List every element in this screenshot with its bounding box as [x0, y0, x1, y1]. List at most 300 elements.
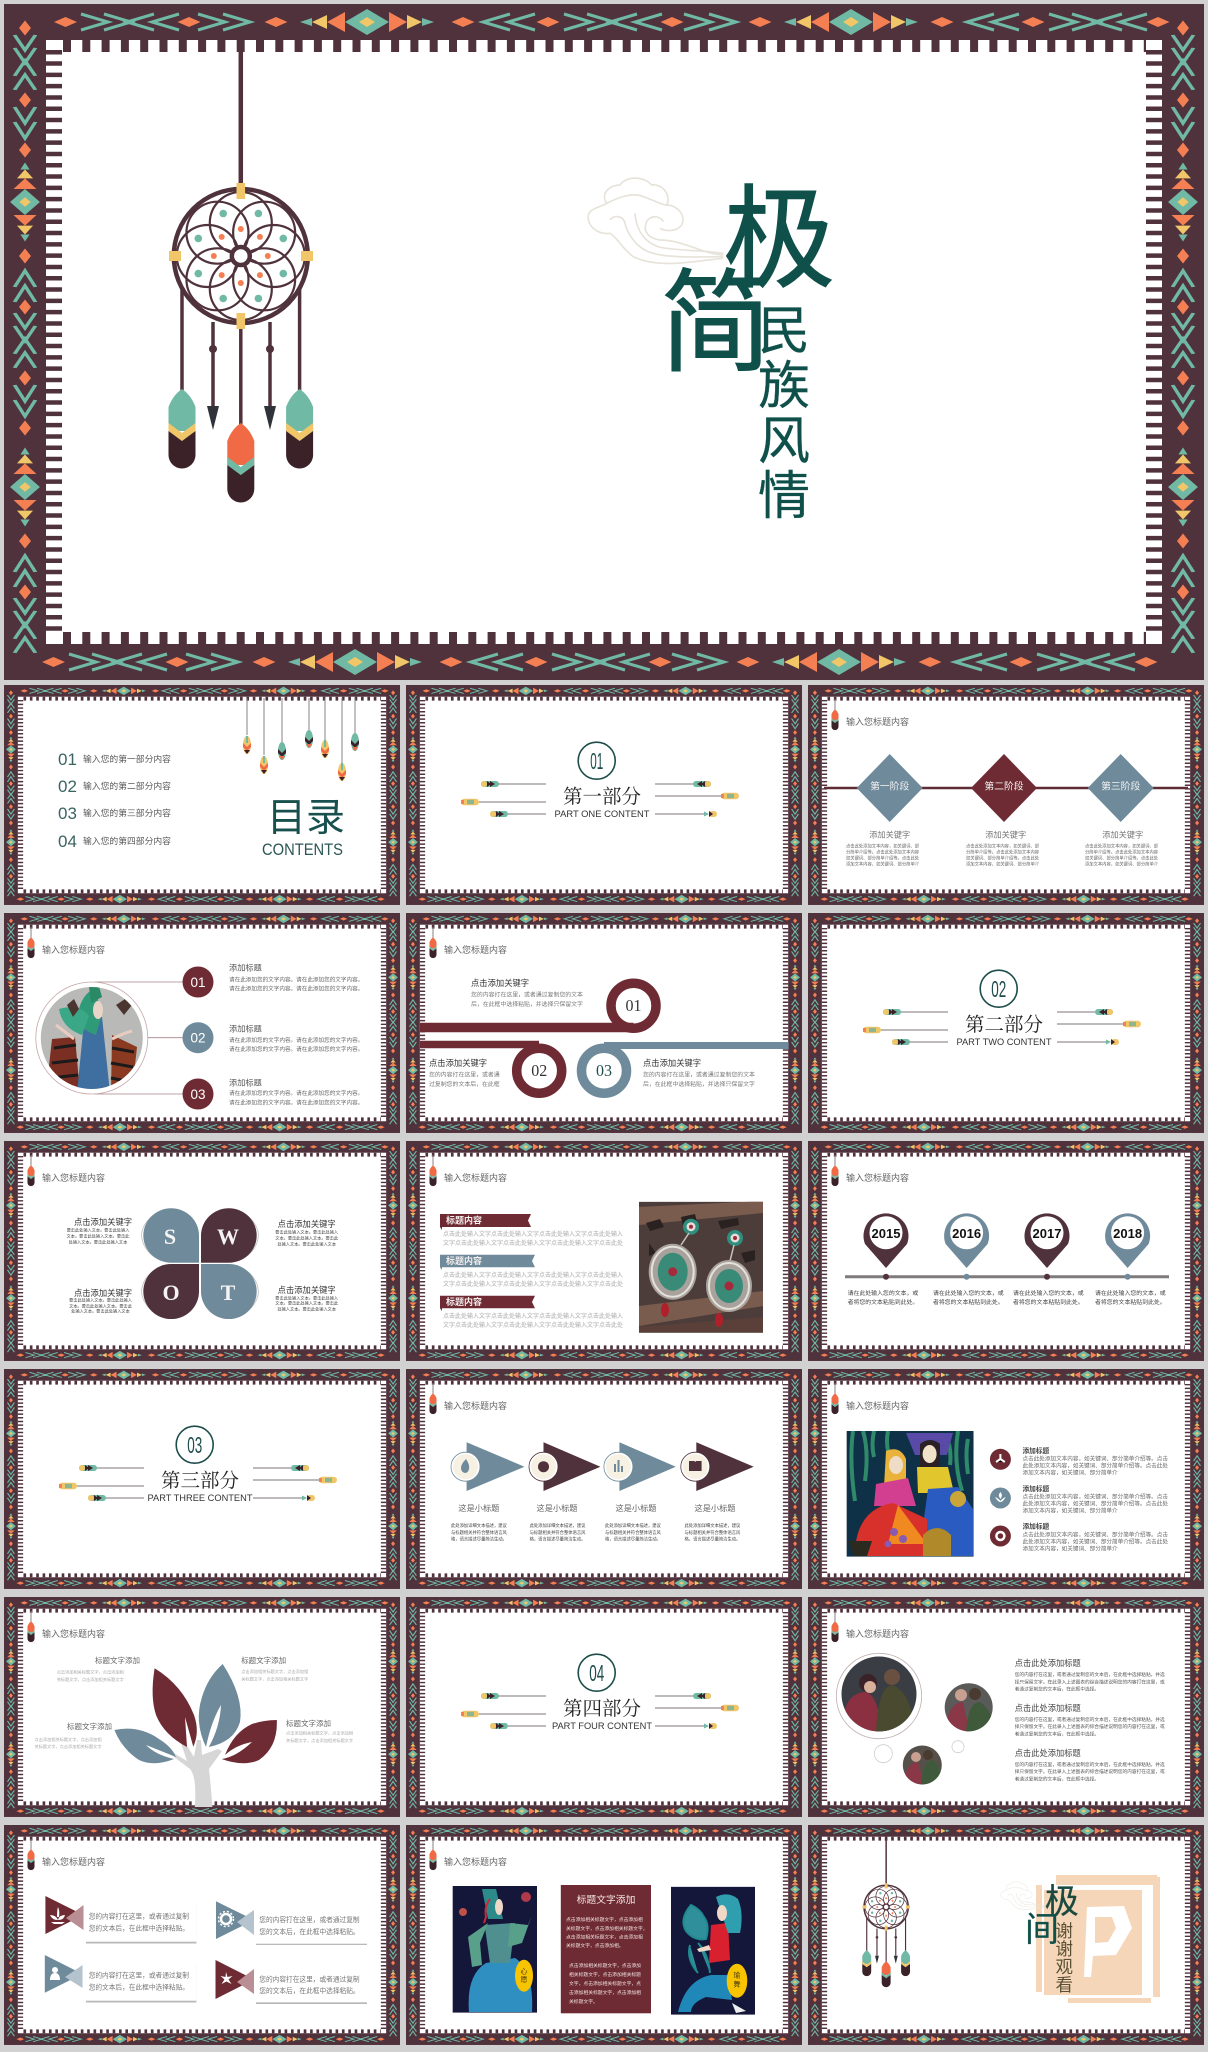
SWOT text: 点击添加关键字: [278, 1219, 336, 1229]
arrow text: 此处添加详细文本描述，建议: [605, 1522, 662, 1529]
text: 心愿: 心: [520, 1968, 528, 1976]
arrows: feather lines: [461, 1693, 739, 1729]
arrow text: 与标题相关并符合整体语言风: [530, 1529, 586, 1536]
photo: earrings: [639, 1201, 763, 1333]
panel: section three: [4, 1369, 400, 1589]
stamp logo: [1036, 1875, 1160, 2003]
text blocks: [1015, 1658, 1165, 1782]
stage text: 如关键词、部分简单介绍等。点击此处: [966, 854, 1040, 862]
painting: two women: [847, 1431, 974, 1557]
text blocks: 者通过复制您的文本后，在此框中选择。: [1015, 1730, 1099, 1738]
panel: ring path diagram: [406, 913, 802, 1133]
panel: section two: [808, 913, 1204, 1133]
frame: [808, 1597, 1204, 1817]
heading: contents: 目录: [267, 797, 345, 840]
list text: 添加标题: [1022, 1484, 1050, 1493]
slide heading: [831, 1155, 909, 1186]
section badge: 04: [589, 1660, 604, 1686]
panel: closing slide: [808, 1825, 1204, 2045]
pin 2017: 2017: [1033, 1226, 1061, 1241]
leaf text: 关标题文字，点击添加相关标题文字: [57, 1676, 124, 1683]
text panel: 相关标题文字，点击添加相关标题: [569, 1971, 641, 1978]
card 2: [216, 1901, 367, 1945]
ribbons: 标题内容: [446, 1296, 482, 1307]
frame: [808, 1825, 1204, 2045]
section badge: 01: [590, 748, 603, 774]
ribbon text: 点击此处输入文字点击此处输入文字点击此处输入文字点击此处输入: [443, 1230, 623, 1238]
contents list: [58, 750, 171, 851]
frame: [4, 1597, 400, 1817]
panel: section one: [406, 685, 802, 905]
frame: [808, 1369, 1204, 1589]
portrait photo: [34, 982, 150, 1094]
contents list: 03: [58, 804, 77, 823]
SWOT text: 处输入文本。要击此处输入文本: [71, 1308, 131, 1314]
SWOT text: 要击此处输入文本。要击此处输入: [275, 1228, 339, 1236]
title: 极: [723, 177, 835, 302]
section title: PART THREE CONTENT: [148, 1493, 253, 1504]
arrows: feather lines: [461, 781, 739, 817]
arrow text: 格，语言描述尽量简洁生动。: [684, 1536, 740, 1542]
SWOT text: 要击此处输入文本。要击此处输入: [67, 1226, 130, 1234]
heading: contents: CONTENTS: [262, 841, 343, 859]
slide heading: 输入您标题内容: [846, 716, 909, 727]
stage text: 点击此处添加文本内容，如关键词、部: [966, 842, 1040, 850]
closing title: 谢: [1056, 1939, 1073, 1959]
stage text: 添加关键字: [869, 830, 910, 840]
slide heading: 输入您标题内容: [846, 1172, 909, 1183]
pin 2018: 2018: [1113, 1226, 1142, 1241]
frame: [4, 685, 400, 905]
list text: 添加文本内容，如关键词、部分简单介: [1022, 1506, 1118, 1514]
SWOT text: 处输入文本。要击此处输入文本: [69, 1238, 128, 1246]
timeline with diamonds: [824, 754, 1188, 822]
arrow text: 这是小标题: [537, 1503, 577, 1513]
arrow text: 这是小标题: [616, 1503, 656, 1513]
contents list: 输入您的第四部分内容: [83, 835, 171, 846]
title: 族: [758, 358, 810, 416]
illustration: dream catcher: [862, 1837, 910, 1987]
timeline text: 请在此处输入您的文本，或: [1095, 1289, 1166, 1297]
illustration: dancing woman right: [671, 1887, 755, 2015]
pin 2016: [944, 1213, 989, 1280]
title: 风: [758, 413, 810, 471]
contents list: 输入您的第一部分内容: [83, 753, 171, 764]
stage text: 如关键词、部分简单介绍等。点击此处: [1085, 854, 1159, 862]
slide heading: [27, 927, 105, 958]
list text: 此处添加文本内容，如关键词、部分简单介绍等。点击此处: [1022, 1462, 1168, 1470]
SWOT text: [67, 1217, 339, 1314]
arrow with flame icon: [451, 1442, 524, 1491]
arrow with book icon: [681, 1442, 754, 1491]
arrow text: 与标题相关并符合整体语言风: [684, 1529, 741, 1536]
list text: 添加标题: [229, 962, 262, 972]
list text: 添加文本内容，如关键词、部分简单介: [1022, 1544, 1118, 1552]
section title: [552, 1698, 652, 1732]
small photo: [902, 1746, 942, 1784]
connector lines: [95, 982, 183, 1094]
frame: [406, 1597, 802, 1817]
empty rings: [874, 1741, 964, 1763]
list text: 添加标题: [229, 1078, 262, 1088]
SWOT text: 文本。要击此处输入文本。要击此: [69, 1302, 133, 1310]
arrow text: 格，语言描述尽量简洁生动。: [605, 1536, 661, 1542]
contents list: 输入您的第三部分内容: [83, 807, 171, 818]
card 1: 您的内容打在这里，或者通过复制: [89, 1912, 189, 1920]
text: 心愿: 愿: [520, 1976, 528, 1984]
slide heading: 输入您标题内容: [846, 1400, 909, 1411]
text panel: 点击添加相关标题文字，点击添加相: [566, 1934, 643, 1940]
list text: 请在此添加您的文字内容。请在此添加您的文字内容。: [229, 1045, 363, 1053]
frame: [4, 1369, 400, 1589]
diagram text: 您的内容打在这里，或者通过复制您的文本: [643, 1071, 755, 1079]
frame: [406, 1369, 802, 1589]
stage text: 点击此处添加文本内容，如关键词、部: [846, 842, 920, 850]
stage text: 添加文本内容，如关键词、部分简单介: [966, 860, 1040, 868]
numbered circles: [182, 966, 214, 1110]
text: 瑜舞: [734, 1970, 740, 1988]
closing title: 看: [1056, 1975, 1073, 1995]
slide heading: [27, 1839, 105, 1870]
timeline text: [848, 1289, 1166, 1306]
arrow text: 这是小标题: [695, 1503, 735, 1513]
ring diagram: 02: [531, 1061, 547, 1080]
list text: 点击此处添加文本内容，如关键词、部分简单介绍等。点击: [1022, 1455, 1168, 1463]
pin 2018: [1105, 1213, 1150, 1280]
arrow text: 与标题相关并符合整体语言风: [451, 1529, 508, 1536]
text: 瑜舞: 舞: [734, 1980, 740, 1988]
icon: cloud ornament: [588, 178, 723, 263]
diagram text: [429, 978, 755, 1088]
timeline with diamonds: 第一阶段: [870, 780, 909, 792]
diagram text: 点击添加关键字: [471, 978, 529, 988]
section title: 第一部分: [563, 786, 641, 808]
panel: illustrated figures: [406, 1825, 802, 2045]
leaf text: 点击添加相关标题文字，点击添加相: [57, 1668, 124, 1676]
numbered circles: 03: [190, 1086, 206, 1102]
stage text: 添加关键字: [1102, 830, 1143, 840]
stage text: 添加文本内容，如关键词、部分简单介: [846, 860, 920, 868]
leaf text: 标题文字添加: [95, 1655, 140, 1665]
panel: ribbons and photo: [406, 1141, 802, 1361]
diagram text: 点击添加关键字: [429, 1058, 487, 1068]
frame: [808, 913, 1204, 1133]
stage text: 分简单介绍等。点击此处添加文本内容: [1085, 848, 1159, 856]
ring diagram: 01: [626, 996, 642, 1015]
illustration: dancing woman left: [453, 1886, 537, 2013]
title: 简: [660, 261, 772, 386]
section badge: [176, 1426, 213, 1463]
list text: 点击此处添加文本内容，如关键词、部分简单介绍等。点击: [1022, 1530, 1168, 1538]
card 4: 您的文本后，在此框中选择粘贴。: [259, 1986, 360, 1995]
frame: [4, 913, 400, 1133]
card 3: 您的内容打在这里，或者通过复制: [89, 1970, 189, 1980]
slide heading: 输入您标题内容: [42, 1172, 105, 1183]
text panel: 关标题文字，点击添加相关标题文字，: [566, 1925, 648, 1932]
text blocks: 点击此处添加标题: [1015, 1748, 1081, 1758]
section title: PART ONE CONTENT: [554, 809, 650, 820]
SWOT text: 处输入文本。要击此处输入文本: [277, 1240, 337, 1248]
ribbon text: 点击此处输入文字点击此处输入文字点击此处输入文字点击此处输入: [443, 1271, 623, 1279]
list text: 请在此添加您的文字内容。请在此添加您的文字内容。: [229, 1089, 363, 1097]
text blocks: 您的内容打在这里，或者通过复制您的文本后，在此框中选择粘贴，并选: [1015, 1716, 1165, 1723]
arrow text: 格，语言描述尽量简洁生动。: [530, 1536, 585, 1542]
text panel: 击添加相关标题文字，点击添加相: [569, 1989, 641, 1996]
section title: 第四部分: [563, 1698, 641, 1720]
text panel: 点击添加相关标题文字，点击添加: [569, 1962, 641, 1969]
arrow with pie icon: [529, 1442, 600, 1491]
closing title: 间: [1025, 1911, 1059, 1949]
medium photo: [944, 1683, 993, 1732]
title: 情: [758, 468, 810, 526]
list text: 添加文本内容，如关键词、部分简单介: [1022, 1468, 1118, 1476]
frame: [808, 1141, 1204, 1361]
timeline text: 者将您的文本粘贴到此处。: [933, 1298, 1004, 1306]
panel: numbered list with portrait: [4, 913, 400, 1133]
leaf text: 标题文字添加: [241, 1655, 286, 1665]
timeline text: 请在此处输入您的文本，或: [933, 1289, 1004, 1297]
section title: [148, 1470, 253, 1504]
stage text: 添加文本内容，如关键词、部分简单介: [1085, 860, 1159, 868]
list text: 添加标题: [229, 1024, 262, 1034]
text blocks: 择只保留文字。在此录入上述图表的综合描述说明您的内容打在这里，或: [1015, 1678, 1165, 1686]
arrow text: 此处添加详细文本描述，建议: [530, 1522, 586, 1529]
section title: PART TWO CONTENT: [956, 1037, 1052, 1048]
slide heading: 输入您标题内容: [444, 944, 507, 955]
ribbons: [440, 1214, 535, 1311]
timeline text: 者将您的文本粘贴到此处。: [848, 1298, 918, 1306]
slide heading: 输入您标题内容: [42, 1856, 105, 1867]
ribbon text: [443, 1230, 623, 1329]
SWOT text: 点击添加关键字: [74, 1288, 132, 1298]
SWOT text: 要击此处输入文本。要击此处输入: [275, 1294, 339, 1302]
contents list: 02: [58, 777, 77, 796]
section badge: [980, 970, 1017, 1007]
panel: SWOT: [4, 1141, 400, 1361]
closing title: 观: [1056, 1957, 1073, 1977]
list text: [1022, 1446, 1168, 1552]
leaf text: 点击添加相关标题文字，点击添加相: [241, 1668, 308, 1675]
panel: cover slide: [4, 4, 1204, 680]
SWOT petals: S: [164, 1224, 176, 1249]
SWOT petals: W: [217, 1224, 239, 1249]
heading: contents: [262, 797, 345, 859]
ribbon text: 文字点击此处输入文字点击此处输入文字点击此处输入文字点击此处: [443, 1280, 623, 1288]
slide heading: [429, 1155, 507, 1186]
leaf text: 关标题文字，点击添加相关标题文字: [286, 1737, 353, 1744]
section badge: 02: [991, 976, 1006, 1002]
decorative ethnic frame: [4, 4, 1204, 680]
text blocks: 您的内容打在这里，或者通过复制您的文本后，在此框中选择粘贴，并选: [1015, 1671, 1165, 1678]
section title: [554, 786, 650, 820]
stage text: 分简单介绍等。点击此处添加文本内容: [846, 848, 920, 856]
diagram text: 后，在此框中选择粘贴，并选择只保留文字: [643, 1080, 755, 1088]
pin 2015: 2015: [872, 1226, 900, 1241]
frame: [406, 1825, 802, 2045]
section title: [956, 1014, 1052, 1048]
panel: year timeline: [808, 1141, 1204, 1361]
pin 2017: [1024, 1213, 1070, 1280]
card 2: 您的内容打在这里，或者通过复制: [259, 1915, 360, 1924]
closing title: 极: [1045, 1883, 1079, 1921]
timeline text: 请在此处输入您的文本，或: [1013, 1289, 1084, 1297]
stage text: 分简单介绍等。点击此处添加文本内容: [966, 848, 1040, 856]
leaf text: 点击添加相关标题文字，点击添加相: [34, 1736, 102, 1743]
frame: [406, 913, 802, 1133]
pin 2016: 2016: [952, 1226, 981, 1241]
ribbons: 标题内容: [446, 1255, 482, 1266]
numbered circles: 02: [190, 1030, 206, 1046]
slide heading: 输入您标题内容: [444, 1400, 507, 1411]
text panel: 关标题文字，点击添加相。: [566, 1942, 624, 1949]
slide heading: 输入您标题内容: [444, 1856, 507, 1867]
slide heading: [429, 927, 507, 958]
panel: contents slide: [4, 685, 400, 905]
section badge: 03: [187, 1432, 202, 1458]
stage text: 点击此处添加文本内容，如关键词、部: [1085, 842, 1159, 850]
timeline with diamonds: 第二阶段: [984, 780, 1024, 792]
panel: leaf tree diagram: [4, 1597, 400, 1817]
text blocks: 点击此处添加标题: [1015, 1703, 1081, 1713]
list text: 此处添加文本内容，如关键词、部分简单介绍等。点击此处: [1022, 1499, 1168, 1507]
list text: [229, 962, 363, 1107]
frame: [4, 1141, 400, 1361]
slide heading: 输入您标题内容: [42, 1628, 105, 1639]
frame: [808, 685, 1204, 905]
stage text: 添加关键字: [985, 830, 1026, 840]
section badge: [578, 742, 615, 779]
cloud ornament: [1001, 1882, 1045, 1909]
ribbon text: 点击此处输入文字点击此处输入文字点击此处输入文字点击此处输入: [443, 1312, 623, 1320]
ring diagram: [420, 983, 789, 1093]
leaf text: 关标题文字，点击添加相关标题文字: [34, 1743, 102, 1750]
arrow text: 格，语言描述尽量简洁生动。: [451, 1536, 507, 1542]
slide heading: 输入您标题内容: [846, 1628, 909, 1639]
SWOT text: 文本。要击此处输入文本。要击此: [275, 1300, 339, 1306]
slide heading: 输入您标题内容: [444, 1172, 507, 1183]
pin 2015: [864, 1213, 908, 1280]
list text: 请在此添加您的文字内容。请在此添加您的文字内容。: [229, 975, 363, 983]
card 1: [45, 1896, 196, 1944]
frame: [406, 1141, 802, 1361]
tree with leaves: [114, 1664, 277, 1807]
panel: section four: [406, 1597, 802, 1817]
text blocks: 您的内容打在这里，或者通过复制您的文本后，在此框中选择粘贴，并选: [1015, 1761, 1165, 1768]
SWOT text: 点击添加关键字: [278, 1285, 336, 1295]
text panel: 点击添加相关标题文字，点击添加相: [566, 1916, 643, 1923]
SWOT text: 点击添加关键字: [74, 1217, 132, 1227]
title: [660, 177, 835, 526]
arrow text: 此处添加详细文本描述，建议: [684, 1522, 741, 1529]
diagram text: 过复制您的文本后，在此框: [429, 1080, 500, 1088]
card 3: [45, 1955, 196, 2002]
card 4: [216, 1960, 367, 2004]
card 2: 您的文本后，在此框中选择粘贴。: [259, 1927, 360, 1936]
SWOT petals: T: [221, 1280, 236, 1305]
frame: [4, 1825, 400, 2045]
list text: 请在此添加您的文字内容。请在此添加您的文字内容。: [229, 1036, 363, 1044]
timeline line: [845, 1275, 1169, 1278]
slide heading: [27, 1611, 105, 1642]
timeline text: 请在此处输入您的文本，或: [848, 1289, 918, 1297]
slide heading: [831, 1611, 909, 1642]
diagram text: 后，在此框中选择粘贴，并选择只保留文字: [471, 1000, 583, 1008]
ribbon text: 文字点击此处输入文字点击此处输入文字点击此处输入文字点击此处: [443, 1321, 623, 1329]
icon circles: [990, 1449, 1011, 1546]
timeline text: 者将您的文本粘贴到此处。: [1013, 1298, 1084, 1306]
text blocks: 者通过复制您的文本后，在此框中选择。: [1015, 1776, 1099, 1782]
slide heading: [429, 1839, 507, 1870]
panel: four cards: [4, 1825, 400, 2045]
arrow text: 此处添加详细文本描述，建议: [451, 1522, 508, 1529]
arrow text: [451, 1503, 741, 1542]
closing title: [1025, 1883, 1079, 1995]
list text: 请在此添加您的文字内容。请在此添加您的文字内容。: [229, 984, 363, 992]
arrows: feather lines: [863, 1009, 1141, 1045]
text panel: [561, 1885, 651, 2013]
text blocks: 择只保留文字。在此录入上述图表的综合描述说明您的内容打在这里，或: [1015, 1768, 1165, 1775]
text: 瑜舞: 瑜: [734, 1970, 740, 1980]
SWOT text: 处输入文本。要击此处输入文本: [277, 1306, 337, 1312]
section title: 第二部分: [965, 1014, 1043, 1036]
card 3: 您的文本后，在此框中选择粘贴。: [89, 1982, 189, 1992]
contents list: 输入您的第二部分内容: [83, 780, 171, 791]
stage text: [846, 830, 1159, 868]
text blocks: 者通过复制您的文本后，在此框中选择。: [1015, 1686, 1099, 1692]
contents list: 01: [58, 750, 77, 769]
list text: 点击此处添加文本内容，如关键词、部分简单介绍等。点击: [1022, 1492, 1168, 1500]
frame: [406, 685, 802, 905]
panel: photo circles: [808, 1597, 1204, 1817]
timeline with diamonds: 第三阶段: [1101, 780, 1140, 792]
SWOT text: 文本。要击此处输入文本。要击此: [67, 1232, 130, 1240]
text: 心愿: [520, 1968, 528, 1984]
panel: painting and list: [808, 1369, 1204, 1589]
slide heading: [27, 1155, 105, 1186]
large photo: [836, 1652, 923, 1739]
panel: four arrows: [406, 1369, 802, 1589]
arrow text: 与标题相关并符合整体语言风: [605, 1529, 662, 1536]
leaf text: 标题文字添加: [67, 1721, 112, 1731]
text panel: 标题文字添加: [577, 1893, 635, 1906]
ribbons: 标题内容: [446, 1214, 482, 1225]
title: 民: [758, 303, 810, 361]
SWOT text: 要击此处输入文本。要击此处输入: [69, 1296, 133, 1304]
list text: 添加标题: [1022, 1446, 1050, 1455]
leaf text: 点击添加相关标题文字，点击添加相: [286, 1730, 353, 1736]
arrow text: 这是小标题: [458, 1503, 499, 1513]
illustration: dream catcher: [168, 40, 313, 502]
diagram text: 点击添加关键字: [643, 1058, 701, 1068]
text panel: 文字，点击添加相关标题文字，点: [569, 1980, 641, 1987]
closing title: 谢: [1056, 1921, 1073, 1941]
section title: 第三部分: [161, 1470, 239, 1492]
card 4: 您的内容打在这里，或者通过复制: [259, 1974, 360, 1984]
diagram text: 您的内容打在这里，或者通: [429, 1071, 500, 1079]
section title: PART FOUR CONTENT: [552, 1721, 652, 1732]
leaf text: 标题文字添加: [286, 1718, 331, 1728]
list text: 添加标题: [1022, 1522, 1050, 1530]
slide heading: [831, 1383, 909, 1414]
SWOT petals: [142, 1208, 258, 1319]
card 1: 您的文本后，在此框中选择粘贴。: [89, 1924, 189, 1932]
list text: 此处添加文本内容，如关键词、部分简单介绍等。点击此处: [1022, 1537, 1168, 1545]
hanging feathers: [243, 698, 359, 781]
panel: three stages: [808, 685, 1204, 905]
leaf text: [34, 1655, 353, 1750]
numbered circles: 01: [190, 974, 206, 990]
section badge: [578, 1654, 615, 1691]
